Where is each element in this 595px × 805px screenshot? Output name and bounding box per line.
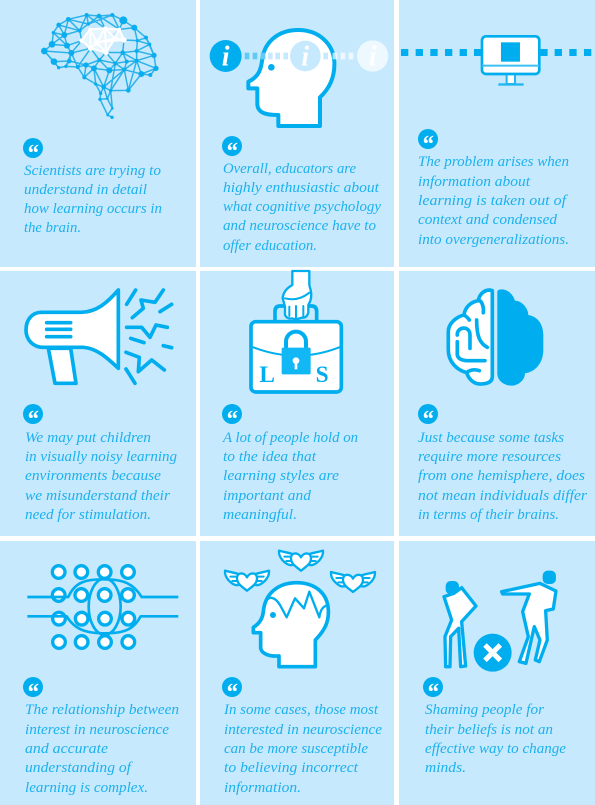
icon: network brain — [41, 13, 159, 119]
panel background — [399, 0, 595, 267]
quote text: learning styles are — [223, 468, 339, 484]
quote text: interested in neuroscience — [224, 722, 382, 738]
quote text: can be more susceptible — [224, 741, 368, 757]
quote text: how learning occurs in — [24, 201, 162, 217]
quote mark — [23, 677, 43, 706]
quote text — [222, 430, 358, 523]
panel background — [0, 0, 196, 267]
quote mark — [418, 404, 438, 433]
quote mark — [418, 129, 438, 158]
panel: susceptible to misinformation — [200, 541, 394, 805]
quote text — [223, 161, 381, 254]
quote text: information about — [418, 174, 531, 190]
quote text: Overall, educators are — [223, 161, 356, 177]
icon: megaphone — [26, 290, 172, 383]
icon: monitor with data line — [401, 36, 591, 86]
quote text: In some cases, those most — [223, 702, 379, 718]
panel background — [200, 271, 394, 536]
icon: information flowing through head: i — [222, 41, 230, 72]
icon: locked briefcase held by hand: S — [316, 362, 329, 388]
panel background — [399, 541, 595, 805]
quote text: effective way to change — [425, 741, 566, 757]
quote text — [25, 430, 177, 523]
panel background — [0, 271, 196, 536]
quote text: we misunderstand their — [25, 488, 170, 504]
quote text: Scientists are trying to — [24, 163, 161, 179]
quote text: A lot of people hold on — [222, 430, 358, 446]
panel: scientists — [0, 0, 196, 267]
quote text: from one hemisphere, does — [418, 468, 585, 484]
quote text — [223, 702, 382, 796]
quote text: meaningful. — [223, 507, 297, 523]
quote mark — [222, 677, 242, 706]
quote text: important and — [223, 488, 311, 504]
icon: locked briefcase held by hand: L — [259, 362, 275, 388]
quote mark: “ — [422, 132, 434, 158]
quote text — [418, 154, 569, 248]
quote text — [425, 702, 566, 776]
quote text: minds. — [425, 760, 466, 776]
panel background — [200, 0, 394, 267]
panel: shaming — [399, 541, 595, 805]
panel: educators — [200, 0, 394, 267]
icon: head with winged hearts — [225, 551, 375, 667]
quote text: not mean individuals differ — [418, 488, 587, 504]
quote mark: “ — [26, 141, 38, 167]
quote text: learning is taken out of — [418, 193, 568, 209]
quote text: Just because some tasks — [418, 430, 564, 446]
quote mark: “ — [226, 139, 238, 165]
quote text: in visually noisy learning — [25, 449, 177, 465]
quote text: to believing incorrect — [224, 760, 359, 776]
quote mark: “ — [226, 680, 238, 706]
quote text: the brain. — [24, 220, 81, 236]
panel background — [200, 541, 394, 805]
panel: noisy environments — [0, 271, 196, 536]
icon: locked briefcase held by hand — [251, 271, 341, 392]
quote mark — [222, 136, 242, 165]
quote text: We may put children — [25, 430, 151, 446]
icon: circle grid with interlaced lines — [27, 566, 178, 648]
quote text: environments because — [25, 468, 161, 484]
quote text: understand in detail — [24, 182, 147, 198]
quote text: The relationship between — [25, 702, 179, 718]
quote text: information. — [224, 780, 301, 796]
panel: learning styles — [200, 271, 394, 536]
quote text: learning is complex. — [25, 780, 148, 796]
icon: pointing figure shaming another figure — [444, 571, 556, 672]
quote text: require more resources — [418, 449, 561, 465]
quote text: and neuroscience have to — [223, 218, 376, 234]
quote mark: “ — [422, 407, 434, 433]
panel background — [0, 541, 196, 805]
icon: information flowing through head: i — [301, 41, 309, 72]
quote text — [24, 163, 162, 236]
quote mark: “ — [426, 680, 438, 706]
quote mark — [423, 677, 443, 706]
quote text: and accurate — [25, 741, 108, 757]
quote text: to the idea that — [223, 449, 317, 465]
quote text: The problem arises when — [418, 154, 569, 170]
quote text: in terms of their brains. — [418, 507, 559, 523]
quote text: need for stimulation. — [25, 507, 151, 523]
quote mark: “ — [26, 407, 38, 433]
quote mark — [222, 404, 242, 433]
quote text: interest in neuroscience — [25, 722, 169, 738]
quote text: understanding of — [25, 760, 133, 776]
quote text: offer education. — [223, 238, 317, 254]
panel: hemispheres — [399, 271, 595, 536]
quote text: what cognitive psychology — [223, 199, 381, 215]
panel: complex relationship — [0, 541, 196, 805]
quote mark — [23, 404, 43, 433]
quote mark: “ — [26, 680, 38, 706]
quote text: highly enthusiastic about — [223, 180, 380, 196]
quote mark — [23, 138, 43, 167]
quote text: their beliefs is not an — [425, 722, 553, 738]
quote text: Shaming people for — [425, 702, 544, 718]
icon: information flowing through head — [210, 30, 388, 126]
quote text: into overgeneralizations. — [418, 232, 569, 248]
icon: two-hemisphere brain — [448, 289, 543, 386]
panel: overgeneralization — [399, 0, 595, 267]
panel background — [399, 271, 595, 536]
icon: information flowing through head: i — [369, 41, 377, 72]
quote text — [25, 702, 179, 796]
quote text — [418, 430, 587, 523]
quote mark: “ — [226, 407, 238, 433]
quote text: context and condensed — [418, 212, 558, 228]
